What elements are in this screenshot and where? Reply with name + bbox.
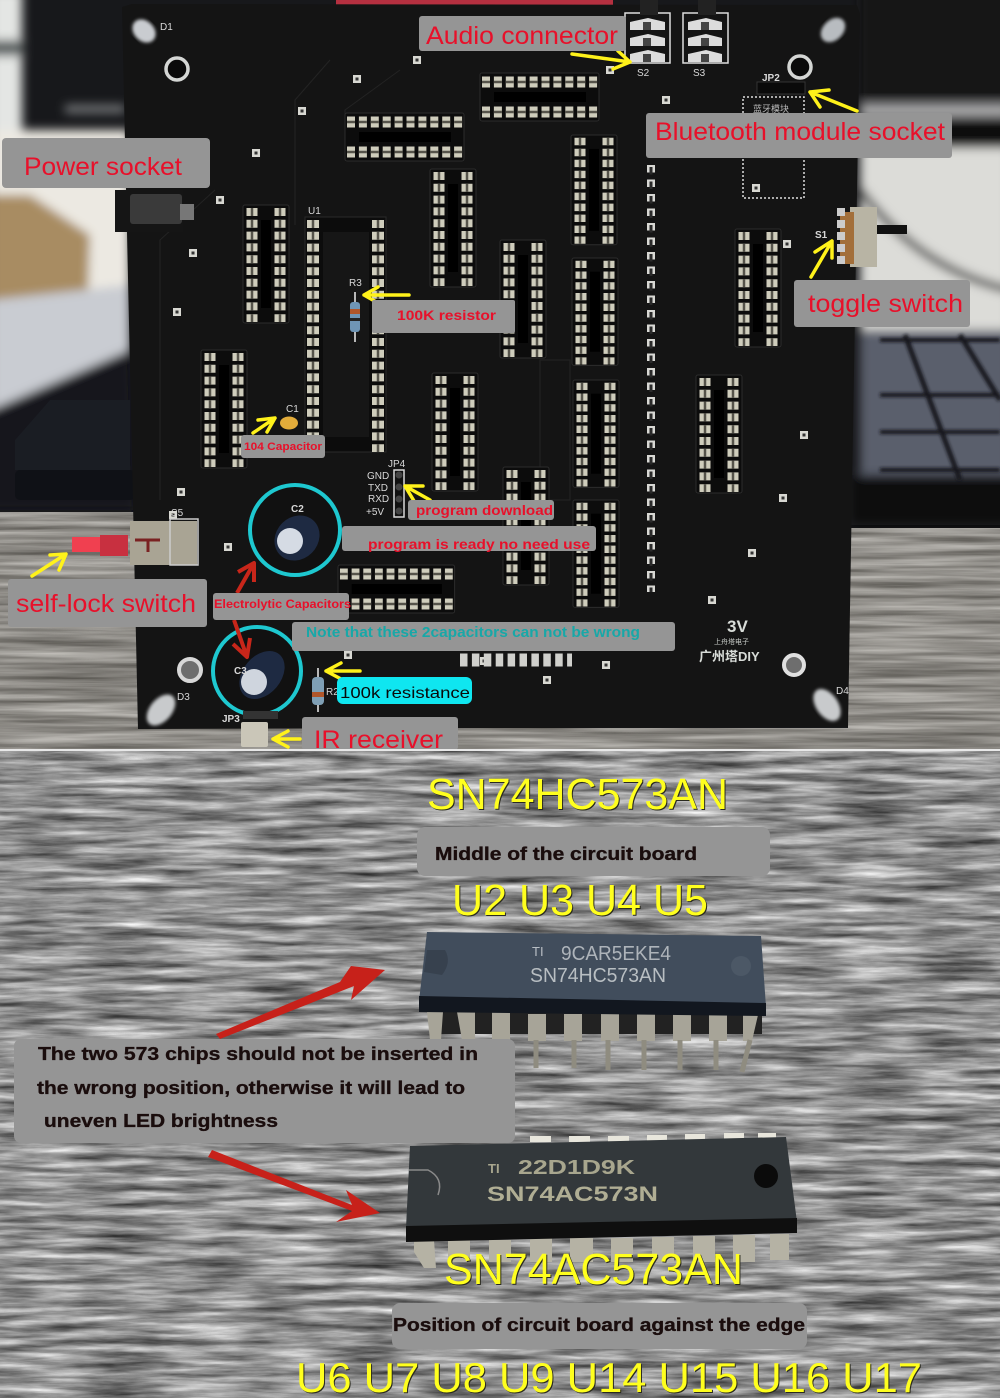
power socket [115,190,194,232]
circuit board [122,4,860,731]
module outline and header JP2 [743,73,805,198]
chip: SN74AC573AN: SN74AC573N [487,1183,658,1206]
label: 100K resistor: 100K resistor [397,307,497,323]
chip: SN74HC573AN: TI [532,944,544,959]
arrow: toggle switch [811,241,832,277]
panel: position against the edge: Position of circuit board against the edge [393,1315,805,1335]
panel: position against the edge [392,1303,807,1349]
module outline and header JP2: 蓝牙模块 [753,103,789,114]
electrolytic capacitor C3: C3 [234,666,247,677]
label: power socket: Power socket [24,153,182,181]
silkscreen labels: S2 [637,68,650,79]
scattered pads [173,60,804,680]
arrow: 100K resistor [364,287,409,303]
chip: SN74HC573AN: 9CAR5EKE4 [561,943,671,965]
silkscreen labels: S5 [171,508,184,519]
resistor R2 [312,668,339,712]
electrolytic capacitor C2 [250,485,340,575]
silkscreen labels: S3 [693,68,706,79]
label: IR receiver [302,717,458,754]
callout: chip warning: the wrong position, otherwise it will lead to [37,1077,465,1098]
label: audio connector [419,16,626,51]
chip: SN74AC573AN: 22D1D9K [518,1157,636,1179]
logo: 上舟塔电子 [714,637,749,646]
arrow to C2 [237,563,254,593]
header JP4: GND [367,471,389,482]
logo: 3V [727,617,748,636]
silkscreen labels: S1 [815,230,828,241]
silkscreen labels [171,68,828,725]
electrolytic capacitor C3 [213,627,301,715]
toggle switch [840,207,907,268]
heading: SN74HC573AN: SN74HC573AN [427,770,728,819]
mounting holes [166,56,811,681]
label: capacitor note [292,622,675,651]
label: program is ready [342,526,596,552]
socket U1: U1 [308,206,321,217]
capacitor C1 [280,404,299,430]
label: 100K resistor [372,300,515,333]
heading: SN74AC573AN: SN74AC573AN [444,1245,743,1294]
arrow: 100k resistance [326,663,360,679]
label: bluetooth module socket: Bluetooth module socket [655,118,945,146]
pad column [647,165,655,592]
callout: chip warning: The two 573 chips should not be inserted in [38,1043,478,1064]
label: electrolytic capacitors [213,593,351,620]
module outline and header JP2: JP2 [762,73,780,84]
logo: 广州塔DIY [699,649,760,664]
label: 100k resistance [337,677,472,704]
label: self-lock switch: self-lock switch [16,590,196,618]
header JP4: JP4 [388,459,406,470]
red arrow to upper chip [216,966,385,1039]
arrow: self-lock switch [32,554,66,576]
arrows: red electrolytic pointers [233,563,254,657]
photo background: top section [0,0,1000,750]
IR receiver [241,711,278,747]
arrow: bluetooth socket [810,90,857,111]
LEDs D1-D4: D3 [177,692,190,703]
label: 104 capacitor: 104 Capacitor [244,441,323,453]
label: 104 capacitor [241,435,325,458]
label: audio connector: Audio connector [426,22,618,50]
arrow: program download [405,486,430,501]
chip: SN74AC573AN [406,1133,797,1268]
chip: SN74AC573AN: TI [488,1161,500,1176]
resistor R3 [349,278,362,342]
label: power socket [2,138,210,188]
LEDs D1-D4: D1 [160,22,173,33]
LEDs D1-D4 [128,13,850,731]
header JP4 [366,459,406,518]
label: toggle switch [794,280,970,327]
header JP4: TXD [368,483,388,494]
socket row pads [460,654,572,666]
callout: chip warning [14,1039,515,1143]
heading: U2 U3 U4 U5: U2 U3 U4 U5 [452,876,708,925]
LEDs D1-D4: D4 [836,686,849,697]
red arrow to lower chip [208,1150,380,1222]
arrow: IR receiver [273,731,300,747]
IC sockets [201,73,781,613]
silkscreen labels: JP3 [222,714,240,725]
socket U1 [305,206,386,452]
arrow: 104 capacitor [253,418,275,433]
label: capacitor note: Note that these 2capacitors can not be wrong [306,624,640,641]
divider [0,749,1000,751]
self-lock switch [72,519,198,565]
label: toggle switch: toggle switch [808,290,963,318]
arrow to C3 [233,620,250,657]
logo [699,617,760,664]
label: electrolytic capacitors: Electrolytic Capacitors [214,599,351,611]
electrolytic capacitor C2: C2 [291,504,304,515]
resistor R3: R3 [349,278,362,289]
label: self-lock switch [8,579,207,627]
chip: SN74HC573AN: SN74HC573AN [530,965,666,987]
photo background: wood lower section [0,751,1000,1398]
label: IR receiver: IR receiver [314,726,443,754]
label: program download: program download [416,502,553,518]
panel: middle of the circuit board: Middle of the circuit board [435,844,697,864]
label: program is ready: program is ready no need use [368,536,590,552]
label: 100k resistance: 100k resistance [340,685,470,702]
label: bluetooth module socket [646,113,952,158]
header JP4: RXD [368,494,389,505]
panel: middle of the circuit board [417,827,770,876]
chip: SN74HC573AN [419,932,766,1072]
arrow: audio connector [572,51,630,69]
resistor R2: R2 [326,687,339,698]
header JP4: +5V [366,507,384,518]
callout: chip warning: uneven LED brightness [44,1110,278,1131]
audio connectors [625,0,728,63]
label: program download [408,500,554,520]
capacitor C1: C1 [286,404,299,415]
arrows: yellow pointers [32,51,857,747]
